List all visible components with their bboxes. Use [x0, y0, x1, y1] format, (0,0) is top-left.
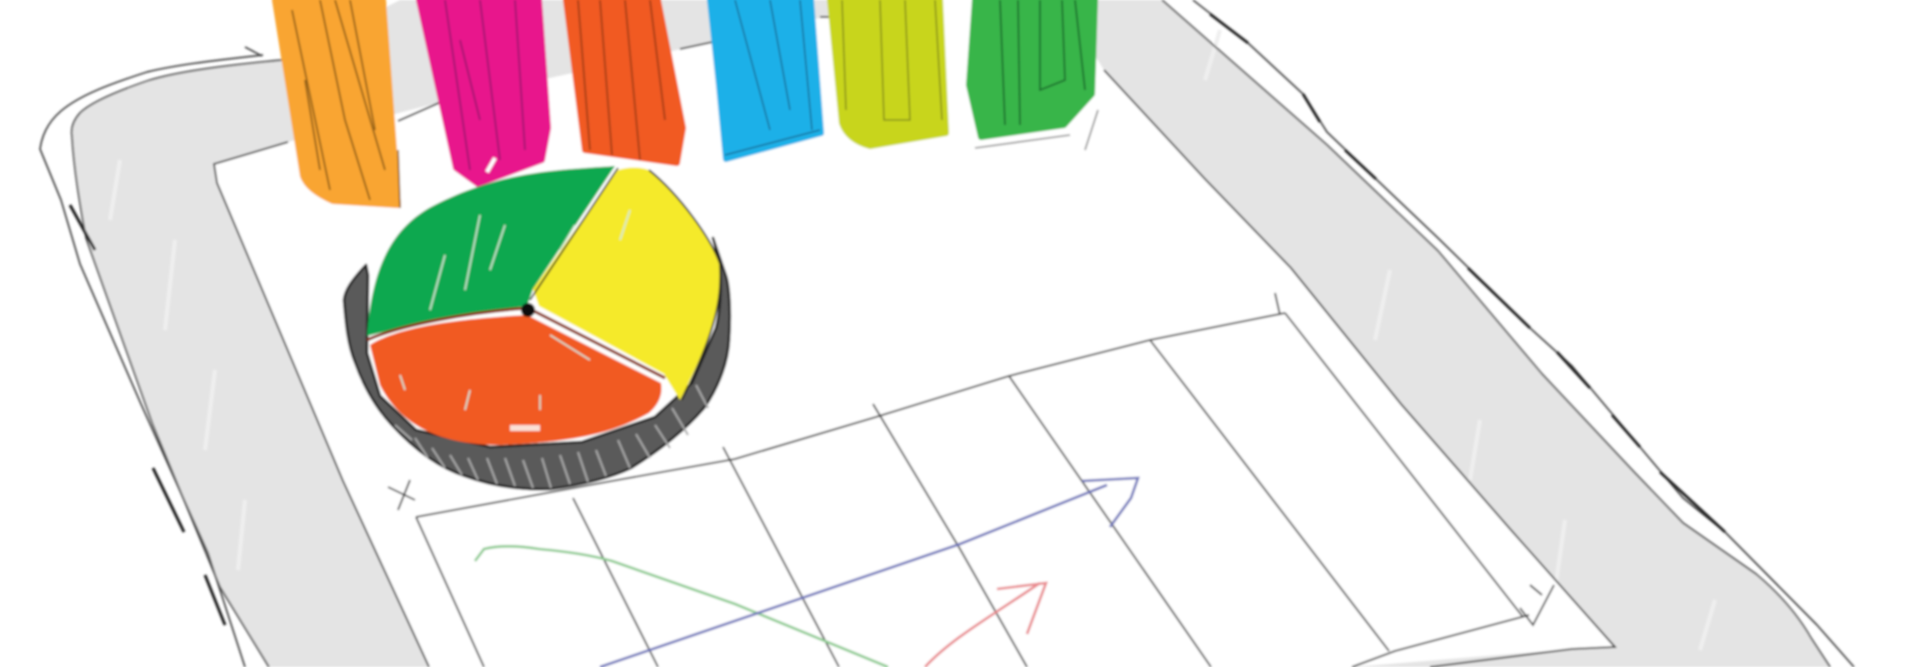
pie slice: yellow — [533, 168, 720, 400]
bar: orange — [566, 0, 683, 163]
pie rim hatching — [395, 385, 708, 488]
bar: amber — [275, 0, 400, 208]
bezel light streaks — [110, 30, 1715, 650]
x-axis arrow mark — [388, 480, 415, 510]
line chart grid — [388, 293, 1554, 667]
screen outline — [214, 17, 1615, 667]
pie rim — [344, 238, 730, 489]
line: green trend — [475, 546, 888, 667]
arrow: red trend — [925, 583, 1046, 667]
pie divider strokes — [367, 308, 665, 378]
bar: magenta — [419, 0, 548, 184]
bar: green — [969, 0, 1098, 150]
pie chart — [344, 166, 730, 489]
tablet screen — [214, 0, 1615, 667]
pie slice: orange — [370, 315, 662, 445]
bar: yellow-green — [830, 0, 946, 146]
bar: blue — [710, 0, 821, 159]
y-axis arrow mark — [1520, 585, 1554, 625]
arrow: blue trend — [600, 478, 1138, 667]
pie slice: green — [367, 166, 615, 336]
